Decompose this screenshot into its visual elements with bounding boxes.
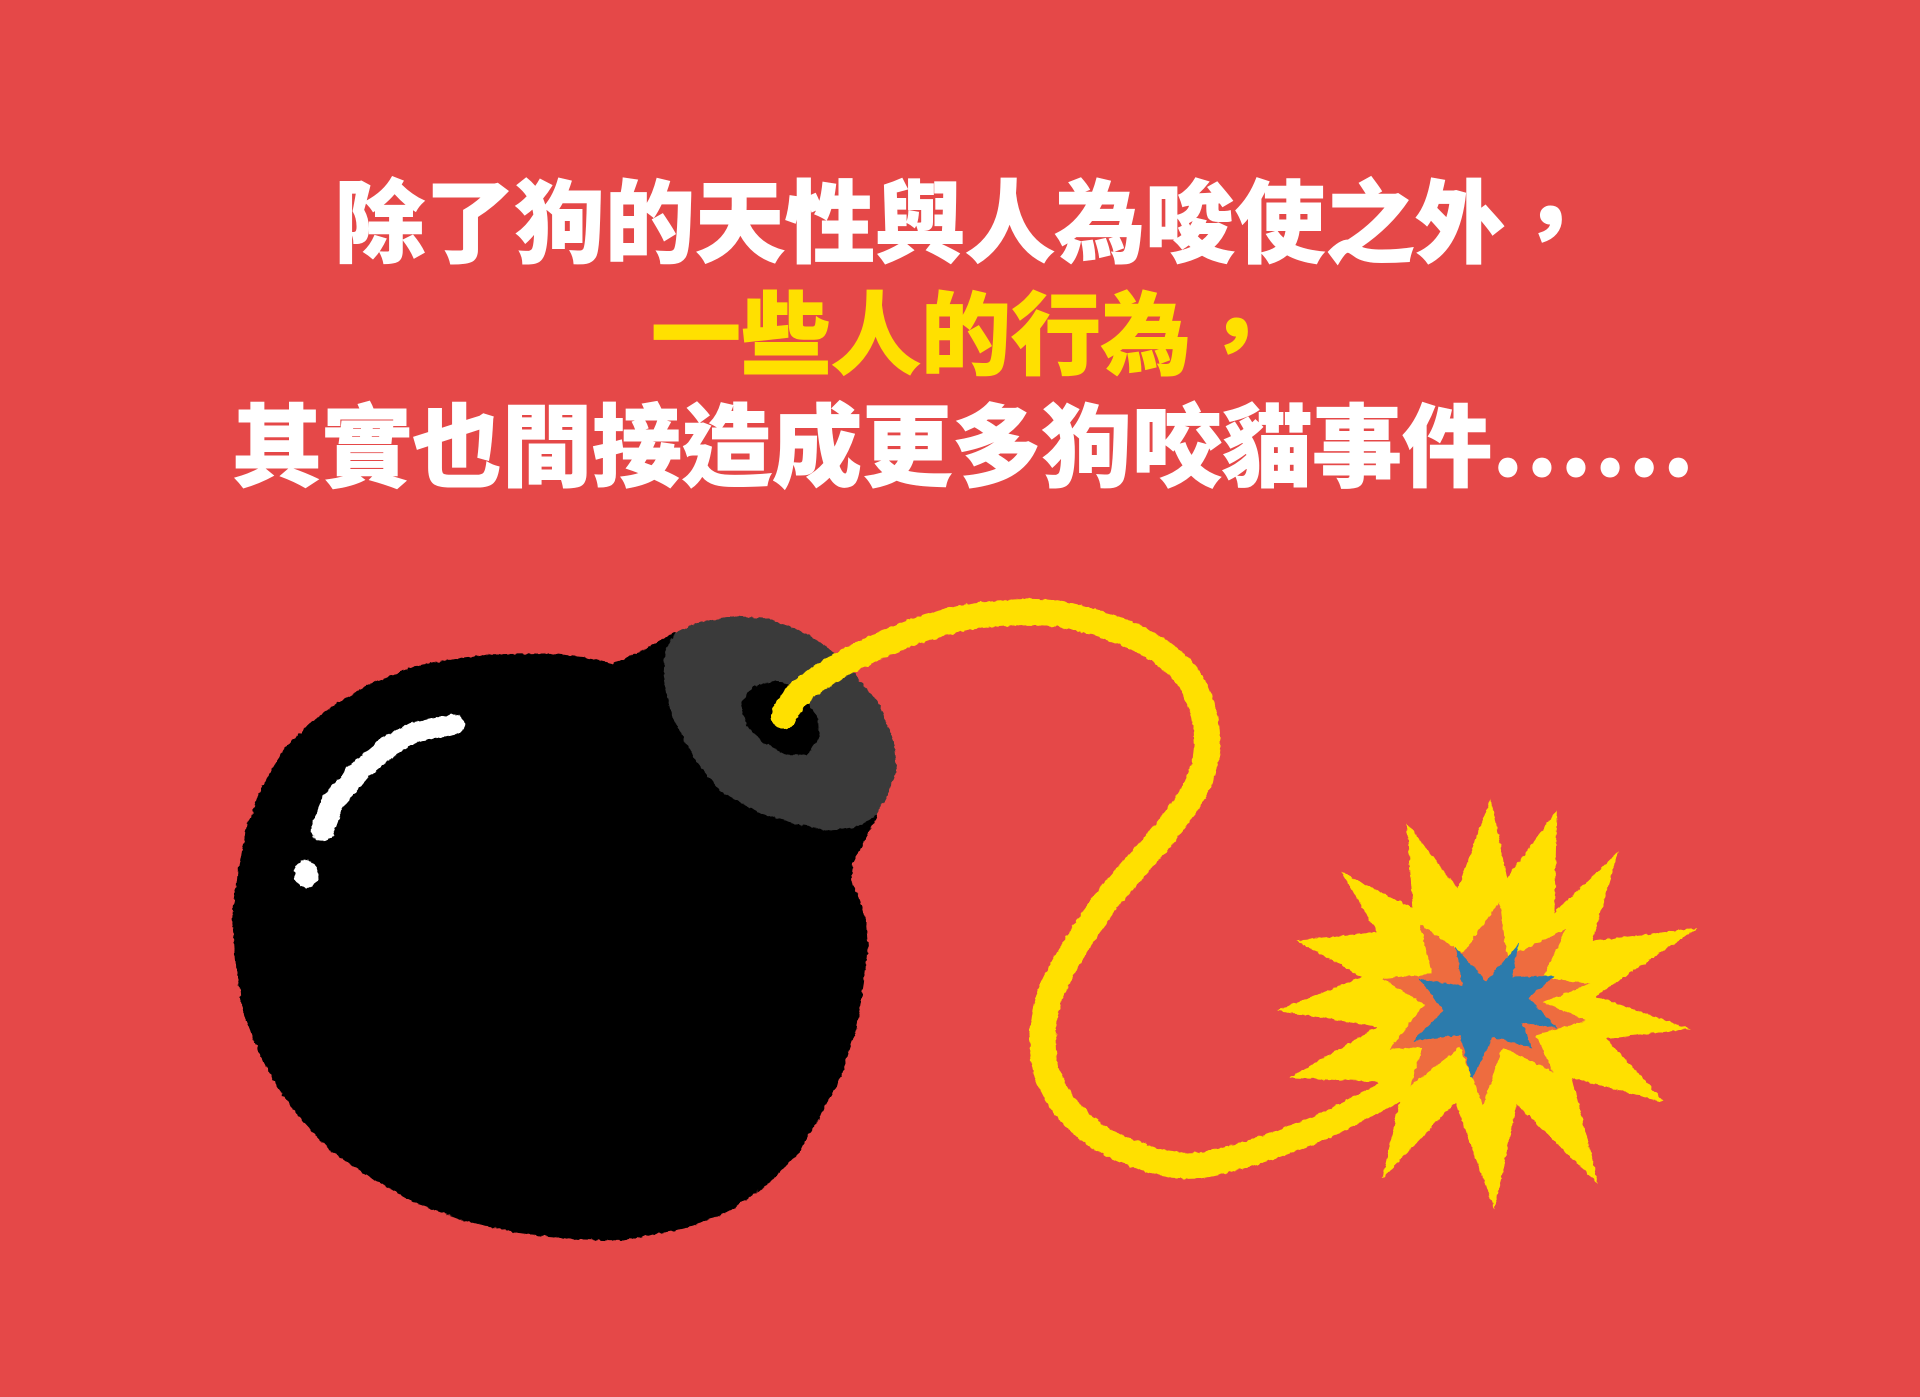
- highlight arc: [322, 724, 454, 831]
- title: line 3: 其實也間接造成更多狗咬貓事件......: [232, 372, 1697, 505]
- title: line 2 highlighted: 一些人的行為，: [651, 263, 1281, 393]
- bomb body: [233, 633, 876, 1240]
- explosion: orange star: [1382, 902, 1590, 1105]
- explosion: blue star: [1413, 943, 1557, 1079]
- bomb cap: [663, 616, 896, 831]
- cap hole: [741, 680, 820, 755]
- fuse: [784, 612, 1406, 1166]
- title: line 1: 除了狗的天性與人為唆使之外，: [335, 151, 1595, 281]
- explosion: yellow starburst: [1277, 798, 1697, 1210]
- highlight dot: [294, 860, 318, 888]
